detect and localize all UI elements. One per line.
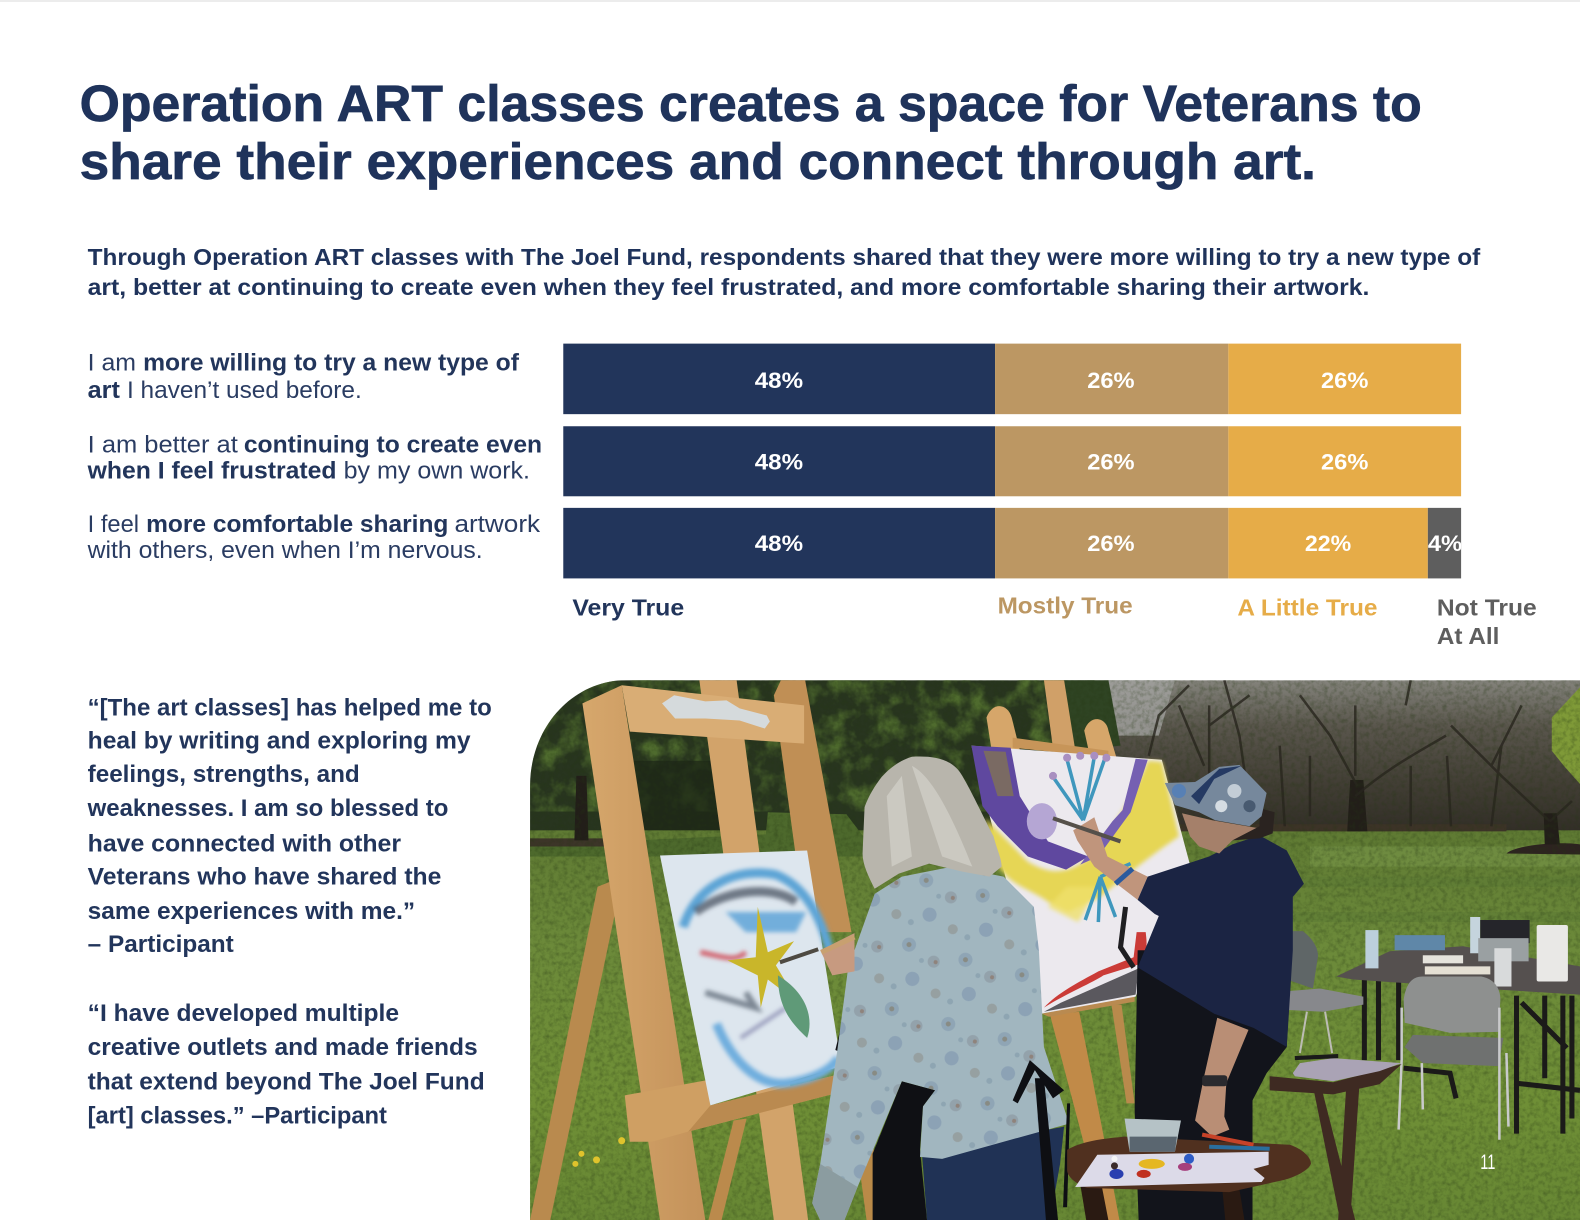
statement 3 — [87, 512, 540, 564]
intro text: art, better at continuing to create even when they feel frustrated, and more comfortable sharing their artwork. — [88, 274, 1369, 300]
participant quote 1: “[The art classes] has helped me to — [88, 695, 492, 721]
statement 3: with others, even when I’m nervous. — [87, 538, 483, 564]
right canvas painting — [971, 746, 1191, 1014]
bar row 3: 48% — [755, 531, 803, 556]
bar row 3: 22% — [1305, 531, 1352, 556]
background folding chair 1 — [1284, 931, 1363, 1053]
participant quote 1: same experiences with me.” — [88, 899, 415, 925]
stacked bar chart — [563, 344, 1462, 578]
participant quote 1: weaknesses. I am so blessed to — [87, 796, 448, 822]
participant quote 1: Veterans who have shared the — [88, 865, 441, 891]
bar row 1: 26% — [1321, 368, 1369, 393]
participant quote 2: “I have developed multiple — [88, 1001, 399, 1027]
survey statements — [87, 350, 542, 564]
legend: At All — [1437, 623, 1499, 649]
background folding chair 2 — [1399, 976, 1508, 1140]
statement 1: more willing to try a new type of — [143, 350, 519, 376]
photo background: trees and grass — [530, 680, 1580, 1220]
statement 3: I feel — [88, 512, 139, 538]
statement 3: more comfortable sharing — [146, 512, 448, 538]
foreground stool with palette and water cup — [1067, 1119, 1311, 1220]
bar row 2: 26% — [1087, 450, 1135, 475]
participant quote 1: have connected with other — [88, 831, 401, 857]
participant quote 2 — [88, 1001, 485, 1130]
statement 1: I am — [88, 350, 136, 376]
bar row 2: 48% — [755, 450, 803, 475]
small side table with palette — [1270, 1056, 1402, 1220]
title — [80, 74, 1422, 190]
participant quote 2: that extend beyond The Joel Fund — [88, 1069, 485, 1095]
page number: 11 — [1480, 1151, 1495, 1174]
statement 2: continuing to create even — [244, 432, 542, 458]
bar row 1 — [563, 344, 1461, 414]
bar row 3 — [563, 508, 1462, 578]
statement 3: artwork — [454, 512, 540, 538]
bar row 3: 26% — [1087, 531, 1135, 556]
painter with camouflage cap and navy hoodie — [1053, 765, 1304, 1220]
left easel — [530, 680, 887, 1220]
legend: A Little True — [1237, 595, 1378, 621]
title: share their experiences and connect through art. — [80, 132, 1316, 190]
painter with grey hair and floral sweater — [780, 757, 1070, 1220]
background folding table with supplies — [1336, 917, 1580, 1134]
participant quote 1: feelings, strengths, and — [88, 762, 360, 788]
bar row 1: 48% — [755, 368, 803, 393]
statement 2 — [87, 432, 542, 485]
statement 1 — [88, 350, 519, 404]
right easel — [986, 680, 1135, 1220]
left canvas painting — [660, 850, 841, 1105]
lawn — [530, 830, 1580, 1220]
bar row 1: 26% — [1087, 368, 1135, 393]
intro text: Through Operation ART classes with The Joel Fund, respondents shared that they were more willing to try a new type of — [88, 244, 1481, 270]
statement 1: I haven’t used before. — [127, 378, 362, 404]
title: Operation ART classes creates a space for Veterans to — [80, 74, 1422, 132]
participant quote 1: – Participant — [88, 932, 234, 958]
bar row 2: 26% — [1321, 450, 1369, 475]
photo: two veterans painting at easels outdoors — [530, 680, 1580, 1220]
participant quote 1 — [87, 695, 492, 958]
bar row 3: 4% — [1428, 531, 1462, 556]
participant quote 2: creative outlets and made friends — [88, 1035, 478, 1061]
statement 2: when I feel frustrated — [87, 459, 337, 485]
statement 2: by my own work. — [344, 459, 530, 485]
legend: Very True — [572, 595, 684, 621]
statement 1: art — [88, 378, 120, 404]
legend: Not True — [1437, 595, 1537, 621]
legend — [572, 593, 1537, 649]
bar row 2 — [563, 426, 1461, 496]
statement 2: I am better at — [88, 432, 238, 458]
participant quote 2: [art] classes.” –Participant — [88, 1104, 387, 1130]
intro text — [88, 244, 1481, 300]
legend: Mostly True — [998, 593, 1133, 619]
participant quote 1: heal by writing and exploring my — [88, 729, 471, 755]
